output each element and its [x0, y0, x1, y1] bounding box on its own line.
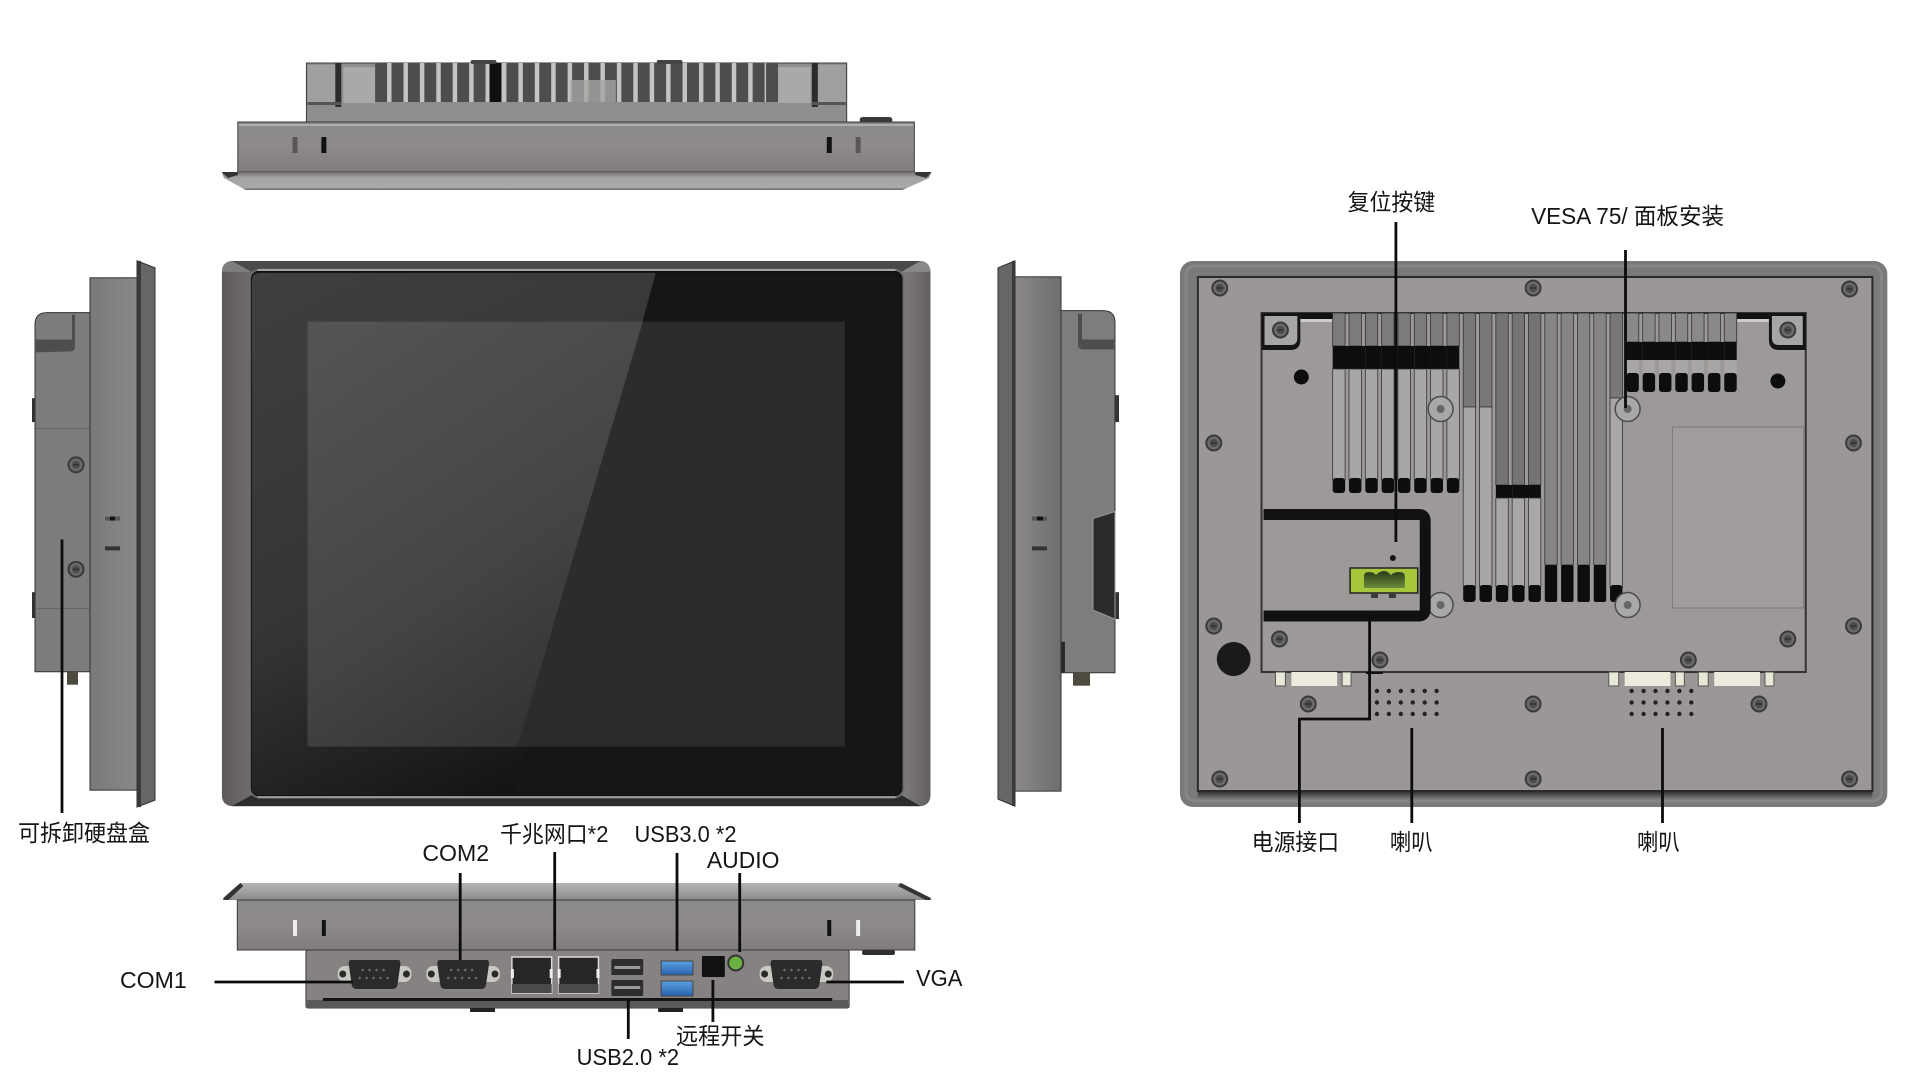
corner brackets	[1262, 313, 1806, 350]
label: VGA: VGA	[916, 965, 963, 991]
port: USB 3.0 x2	[661, 961, 693, 996]
black round button	[1217, 642, 1251, 676]
reset button	[1390, 555, 1396, 561]
label: VESA mount: VESA 75/ 面板安装	[1531, 203, 1724, 229]
label: USB 2.0 x2: USB2.0 *2	[577, 1044, 679, 1070]
VESA standoffs	[1428, 396, 1640, 618]
label: USB 3.0 x2: USB3.0 *2	[634, 821, 736, 847]
label: reset button: 复位按键	[1348, 189, 1435, 215]
port: USB 2.0 x2	[611, 959, 643, 996]
rear view of the device	[1180, 261, 1887, 807]
label: AUDIO: AUDIO	[707, 847, 779, 873]
label: speaker left: 喇叭	[1390, 829, 1433, 855]
leader lines	[62, 222, 1662, 1039]
heat sink fins	[1333, 313, 1737, 602]
DB connectors	[1275, 672, 1774, 686]
port: COM2	[426, 960, 500, 989]
rear panel screws	[1206, 280, 1861, 786]
label: remote switch: 远程开关	[676, 1023, 764, 1049]
label area	[1672, 427, 1804, 608]
port: gigabit LAN x2	[511, 957, 599, 993]
removable drive bay frame	[1264, 514, 1425, 616]
front view: touch screen	[222, 261, 930, 806]
port: COM1	[338, 960, 411, 989]
mounting holes	[1294, 370, 1785, 388]
top view of the device	[222, 60, 931, 190]
right side view of the device	[998, 261, 1119, 806]
label: gigabit LAN x2: 千兆网口*2	[500, 821, 608, 847]
label: speaker right: 喇叭	[1637, 829, 1680, 855]
label: removable drive bay: 可拆卸硬盘盒	[18, 820, 150, 846]
label: COM1: COM1	[120, 967, 187, 993]
port: VGA	[760, 960, 833, 989]
port: audio jack	[727, 954, 744, 972]
bottom view of the device with I/O ports	[223, 883, 931, 1012]
label: power connector: 电源接口	[1252, 829, 1339, 855]
rear chassis cover	[1262, 313, 1806, 672]
left side view of the device	[32, 261, 155, 807]
port: remote switch	[702, 956, 725, 977]
power connector	[1350, 568, 1418, 598]
screen glass	[250, 269, 903, 798]
speaker holes	[1375, 689, 1694, 716]
label: COM2: COM2	[422, 840, 489, 866]
